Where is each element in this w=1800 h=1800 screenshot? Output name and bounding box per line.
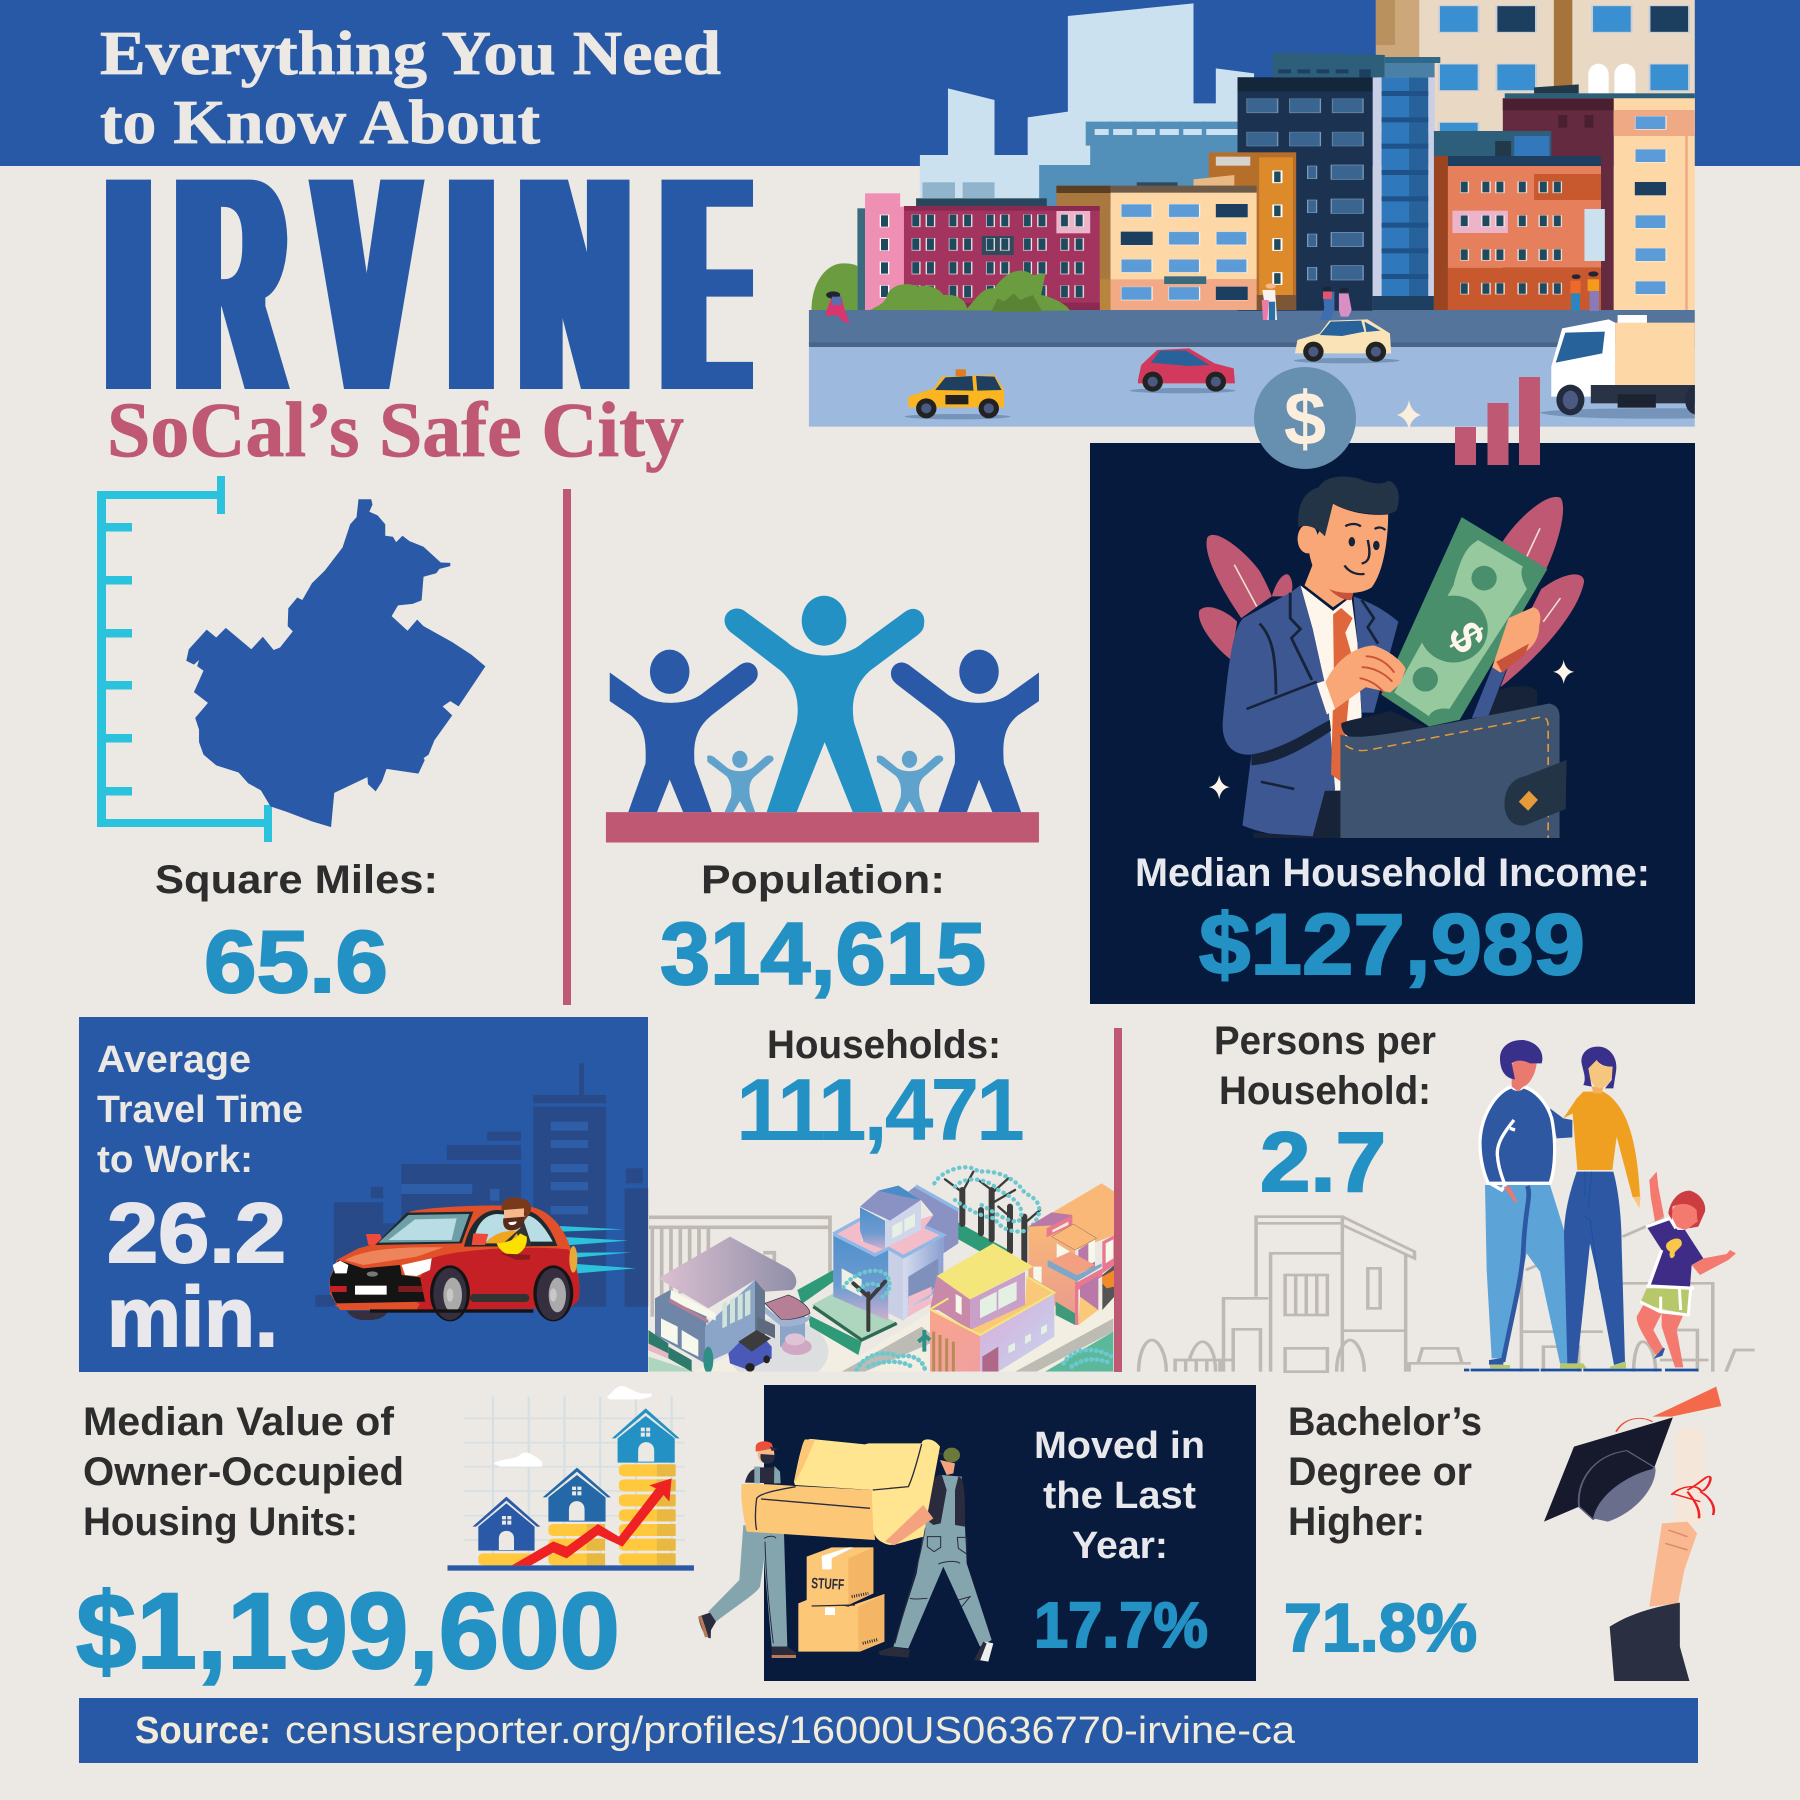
house 3 bbox=[930, 1309, 980, 1372]
title: to Know About: to Know About bbox=[100, 89, 540, 157]
value: min.: min. bbox=[107, 1270, 278, 1364]
base line bbox=[448, 1565, 694, 1571]
illustration: graduation cap and diploma bbox=[1544, 1387, 1721, 1681]
right mover bbox=[893, 1523, 992, 1648]
box label: STUFF bbox=[811, 1575, 845, 1594]
value: 65.6 bbox=[204, 912, 388, 1011]
label line 1: Bachelor’s bbox=[1288, 1400, 1482, 1444]
value: 314,615 bbox=[660, 904, 986, 1003]
value: 111,471 bbox=[736, 1060, 1025, 1159]
illustration: red car with driver bbox=[329, 1197, 636, 1321]
house small bbox=[473, 1497, 540, 1551]
orange narrow building bbox=[1137, 152, 1296, 310]
value: $127,989 bbox=[1199, 897, 1585, 993]
illustration: isometric houses bbox=[648, 1167, 1114, 1385]
icon: people group bbox=[606, 596, 1039, 842]
hedges and lawn bbox=[958, 1222, 1007, 1252]
divider bbox=[1114, 1028, 1122, 1372]
value: 71.8% bbox=[1284, 1590, 1477, 1666]
red arrow bbox=[512, 1478, 672, 1565]
illustration: skyline bbox=[316, 1063, 648, 1307]
dark navy tower bbox=[1238, 77, 1373, 311]
panel: persons per household bbox=[1139, 1019, 1755, 1372]
top banner bbox=[0, 0, 1800, 166]
label line 1: Persons per bbox=[1214, 1019, 1436, 1063]
blue car bbox=[728, 1341, 772, 1370]
panel background bbox=[764, 1385, 1256, 1681]
ground bbox=[692, 1283, 1114, 1372]
glass tower bbox=[1273, 52, 1440, 310]
label: Square Miles: bbox=[155, 858, 438, 902]
icon: dollar coin bbox=[1254, 367, 1356, 469]
planters bbox=[648, 1330, 668, 1358]
woman bbox=[1564, 1172, 1625, 1365]
map of Irvine bbox=[186, 499, 485, 827]
label line 3: to Work: bbox=[97, 1139, 253, 1181]
peach building bbox=[1056, 186, 1257, 310]
label: Median Household Income: bbox=[1135, 851, 1650, 895]
panel: population bbox=[606, 596, 1039, 1003]
pedestrians bbox=[826, 271, 1599, 323]
illustration: family bbox=[1464, 1040, 1736, 1370]
panel background bbox=[79, 1017, 648, 1372]
leaves bbox=[1199, 497, 1584, 687]
grille and lights bbox=[330, 1260, 425, 1303]
teal mid-rise bbox=[1039, 122, 1240, 207]
bar background bbox=[79, 1698, 1698, 1763]
divider bbox=[563, 489, 571, 1005]
panel: median household income bbox=[1135, 476, 1650, 993]
delivery truck bbox=[1540, 315, 1695, 419]
label line 3: Year: bbox=[1072, 1525, 1168, 1567]
source label: Source: bbox=[135, 1710, 271, 1752]
back trees bbox=[945, 1172, 1040, 1262]
green bushes bbox=[811, 263, 1070, 312]
house 1 bbox=[655, 1290, 707, 1363]
panel: income background bbox=[1090, 443, 1695, 1004]
label line 3: Higher: bbox=[1288, 1500, 1425, 1544]
shrubs bbox=[857, 1350, 1112, 1370]
beige high-rise bbox=[1376, 0, 1695, 136]
sparkles bbox=[1553, 660, 1574, 684]
panel: square miles bbox=[97, 476, 485, 1011]
value: 26.2: 26.2 bbox=[107, 1186, 286, 1280]
front tree bbox=[853, 1282, 885, 1330]
man torso bbox=[1550, 1108, 1572, 1138]
icon: sparkle bbox=[1397, 400, 1421, 430]
man legs bbox=[1485, 1185, 1568, 1363]
taxi bbox=[905, 369, 1010, 419]
source bar bbox=[79, 1698, 1698, 1763]
label line 2: Travel Time bbox=[97, 1089, 303, 1131]
shirt and tie bbox=[1300, 585, 1362, 791]
panel: moved in the last year bbox=[698, 1385, 1256, 1681]
driver bbox=[485, 1231, 523, 1243]
right mover arm bbox=[885, 1505, 933, 1545]
orange brick block bbox=[1434, 84, 1695, 310]
label line 1: Moved in bbox=[1034, 1425, 1205, 1467]
jacket bbox=[1223, 585, 1398, 838]
value: 2.7 bbox=[1260, 1115, 1386, 1209]
house 2 bbox=[908, 1186, 958, 1253]
panel: households bbox=[648, 1023, 1114, 1385]
panel: bachelor's degree bbox=[1284, 1387, 1721, 1681]
beige car bbox=[1294, 319, 1399, 363]
label line 1: Average bbox=[97, 1039, 251, 1081]
red car bbox=[1130, 348, 1236, 393]
label line 2: Household: bbox=[1219, 1069, 1431, 1113]
child bbox=[1649, 1172, 1664, 1222]
neck and face bbox=[1304, 549, 1366, 607]
title: Everything You Need: Everything You Need bbox=[100, 20, 721, 88]
left mover bbox=[708, 1525, 787, 1647]
label line 1: Median Value of bbox=[83, 1400, 395, 1444]
tall peach apartment bbox=[1614, 98, 1695, 310]
label line 2: Degree or bbox=[1288, 1450, 1472, 1494]
icon: rising bars bbox=[1455, 377, 1540, 465]
title: IRVINE: IRVINE bbox=[108, 108, 761, 461]
label: Population: bbox=[701, 858, 945, 902]
panel: median home value bbox=[76, 1386, 694, 1691]
blue sleeve behind bill bbox=[1472, 667, 1507, 718]
road and sidewalk bbox=[809, 310, 1695, 427]
bill dollar sign: $ bbox=[1438, 613, 1496, 661]
label line 3: Housing Units: bbox=[83, 1500, 358, 1544]
city illustration bbox=[809, 0, 1695, 427]
source url: censusreporter.org/profiles/16000US0636770-irvine-ca bbox=[285, 1710, 1296, 1752]
label line 2: the Last bbox=[1043, 1475, 1196, 1517]
hands bbox=[1492, 607, 1540, 673]
illustration: movers with sofa bbox=[698, 1439, 993, 1662]
panel: average travel time bbox=[79, 1017, 648, 1372]
value: 17.7% bbox=[1034, 1589, 1208, 1661]
house large bbox=[612, 1408, 680, 1463]
coin stacks bbox=[478, 1464, 676, 1565]
line art houses bbox=[1139, 1217, 1755, 1372]
label line 2: Owner-Occupied bbox=[83, 1450, 404, 1494]
label: Households: bbox=[767, 1023, 1001, 1067]
boxes bbox=[807, 1547, 873, 1605]
value: $1,199,600 bbox=[76, 1570, 620, 1691]
wallet back bbox=[1488, 686, 1537, 716]
maroon and pink apartments bbox=[857, 182, 1100, 310]
chart: houses on coin stacks bbox=[448, 1386, 694, 1571]
icon: map scale bracket bbox=[97, 476, 272, 842]
icon: dollar coin: $ bbox=[1284, 377, 1326, 462]
house medium bbox=[543, 1468, 611, 1522]
pale skyline bbox=[920, 3, 1254, 207]
illustration: man with bill and wallet bbox=[1199, 476, 1584, 838]
speed lines bbox=[558, 1226, 636, 1273]
wheels bbox=[430, 1265, 470, 1321]
ground line bbox=[1464, 1366, 1698, 1374]
wallet bbox=[1341, 711, 1427, 740]
subtitle: SoCal’s Safe City bbox=[107, 386, 684, 473]
dollar bill bbox=[1381, 517, 1547, 726]
house 4 bbox=[1028, 1183, 1114, 1250]
sofa bbox=[794, 1439, 940, 1545]
fence bbox=[649, 1217, 830, 1317]
